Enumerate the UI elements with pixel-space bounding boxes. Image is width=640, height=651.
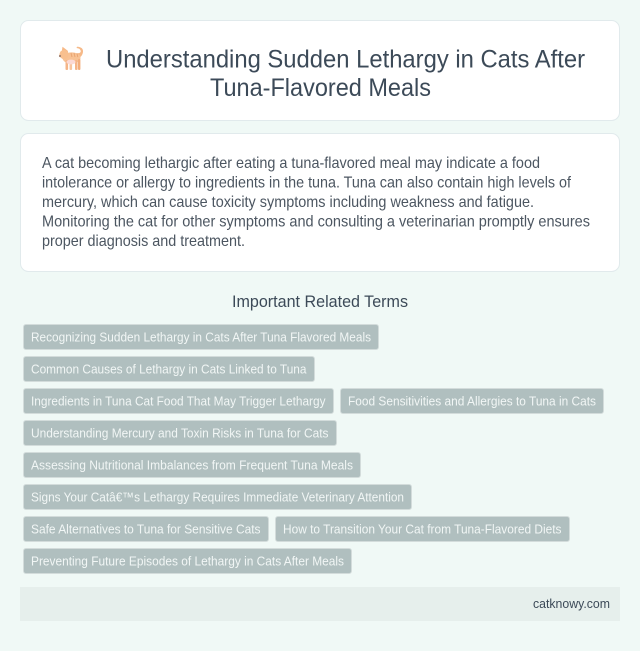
tag: preventing: Preventing Future Episodes of Lethargy in Cats After Meals xyxy=(31,553,344,568)
tag: recognizing lethargy: Recognizing Sudden Lethargy in Cats After Tuna Flavored Meals xyxy=(31,329,371,344)
tag: nutritional imbalances: Assessing Nutritional Imbalances from Frequent Tuna Meals xyxy=(31,457,353,472)
text block: summary: intolerance or allergy to ingredients in the tuna. Tuna can also contain high levels of xyxy=(42,174,572,192)
tag: preventing xyxy=(24,548,352,574)
tag: mercury: Understanding Mercury and Toxin Risks in Tuna for Cats xyxy=(31,425,328,440)
tag: ingredients xyxy=(24,388,334,414)
text block: summary xyxy=(42,155,590,250)
tag: safe alternatives: Safe Alternatives to Tuna for Sensitive Cats xyxy=(31,521,260,536)
title: Understanding Sudden Lethargy in Cats After xyxy=(106,46,586,74)
tag: signs xyxy=(24,484,412,510)
footer bar xyxy=(20,587,620,621)
tag: ingredients: Ingredients in Tuna Cat Food That May Trigger Lethargy xyxy=(31,393,326,408)
title: Tuna-Flavored Meals xyxy=(210,74,431,102)
title xyxy=(106,46,586,102)
heading: related terms: Important Related Terms xyxy=(232,293,408,311)
tag: food sensitivities xyxy=(340,388,604,414)
panel: summary text card xyxy=(20,134,620,272)
tag: common causes: Common Causes of Lethargy in Cats Linked to Tuna xyxy=(31,361,307,376)
panel: title card xyxy=(20,20,620,120)
text block: summary: mercury, which can cause toxicity symptoms including weakness and fatigue. xyxy=(42,194,534,211)
text block: summary: proper diagnosis and treatment. xyxy=(42,233,245,250)
tag: transition: How to Transition Your Cat from Tuna-Flavored Diets xyxy=(283,521,562,536)
tag list: related terms xyxy=(24,324,604,574)
tag: safe alternatives xyxy=(24,516,268,542)
footer: source: catknowy.com xyxy=(533,596,610,611)
tag: mercury xyxy=(24,420,336,446)
text block: summary: A cat becoming lethargic after eating a tuna-flavored meal may indicate a food xyxy=(42,155,540,172)
tag: nutritional imbalances xyxy=(24,452,360,478)
tag: signs: Signs Your Catâ€™s Lethargy Requires Immediate Veterinary Attention xyxy=(31,489,404,504)
text block: summary: Monitoring the cat for other symptoms and consulting a veterinarian promptly ensures xyxy=(42,214,590,230)
tag: transition xyxy=(276,516,570,542)
tag: recognizing lethargy xyxy=(24,324,378,350)
tag: food sensitivities: Food Sensitivities and Allergies to Tuna in Cats xyxy=(348,393,596,408)
icon: cat xyxy=(59,47,83,70)
tag: common causes xyxy=(24,356,314,382)
